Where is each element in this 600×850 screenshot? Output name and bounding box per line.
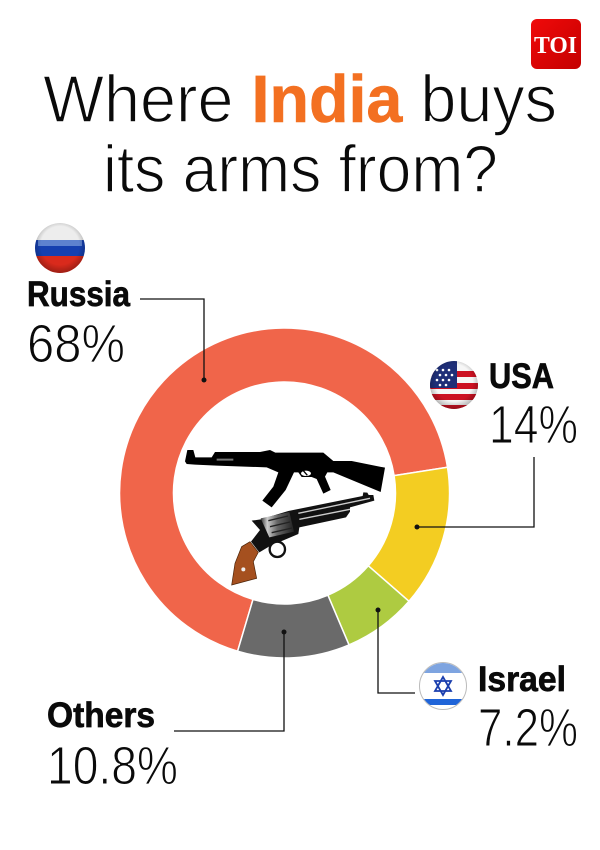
- label: Others: Others: [47, 696, 155, 735]
- label: Others: [47, 696, 178, 796]
- title: [43, 62, 557, 207]
- icon: assault rifle: [185, 450, 385, 507]
- connector: Israel: [376, 608, 415, 693]
- icon: Russia flag: [35, 223, 85, 273]
- segment: Israel 7.2%: [328, 566, 409, 645]
- label: USA: [489, 357, 578, 455]
- icon: USA flag: [430, 361, 478, 410]
- label: USA: USA: [489, 357, 554, 396]
- label: Others: 10.8%: [47, 736, 178, 796]
- label: Russia: 68%: [27, 314, 125, 374]
- connector: Russia: [140, 299, 206, 382]
- label: Israel: Israel: [478, 660, 566, 699]
- segment: Others 10.8%: [238, 595, 349, 658]
- segment: USA 14%: [368, 467, 450, 601]
- label: Russia: [27, 275, 130, 374]
- icon: revolver: [232, 492, 374, 585]
- label: Israel: [478, 660, 578, 758]
- connector: Others: [174, 630, 286, 731]
- title: Where India buys: [43, 62, 557, 137]
- donut chart: [120, 328, 450, 658]
- label: USA: 14%: [489, 395, 578, 455]
- logo: TOI badge: TOI: [534, 33, 577, 59]
- icon: Israel flag: [420, 662, 466, 710]
- title: its arms from?: [103, 132, 498, 207]
- segment: Russia 68%: [120, 328, 448, 651]
- label: Russia: Russia: [27, 275, 130, 314]
- label: Israel: 7.2%: [478, 698, 578, 758]
- connector: USA: [414, 457, 534, 530]
- logo: TOI badge: [531, 19, 581, 69]
